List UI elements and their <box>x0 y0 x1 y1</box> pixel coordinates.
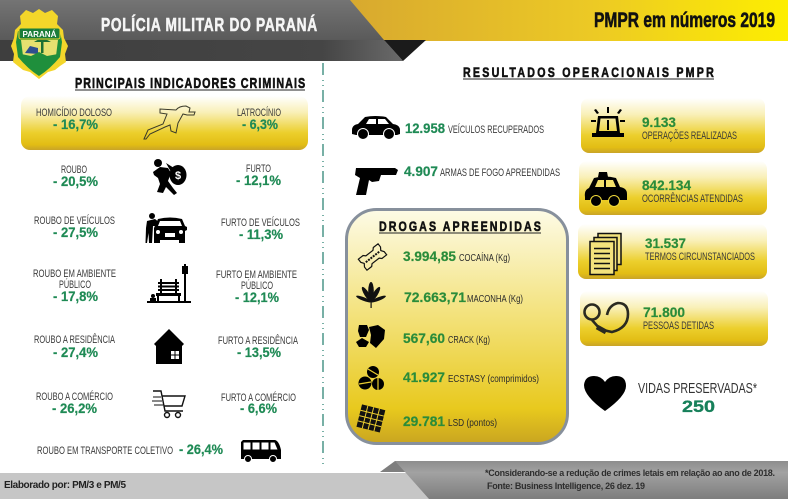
indicator: roubo de veículos: ROUBO DE VEÍCULOS <box>34 214 115 227</box>
stat: crack <box>403 331 490 346</box>
indicator: furto <box>236 163 281 188</box>
indicator: roubo a residência <box>34 333 115 360</box>
indicator: furto em ambiente público: PÚBLICO <box>241 279 273 292</box>
indicator: roubo: ROUBO <box>61 164 87 176</box>
stat: ecstasy: 41.927 <box>403 370 445 385</box>
header banner <box>0 0 788 61</box>
icon: recovered car <box>352 116 400 140</box>
indicator: roubo em transporte coletivo: - 26,4% <box>179 442 223 457</box>
indicator: roubo <box>53 164 98 189</box>
indicator: homicídio doloso: - 16,7% <box>53 117 98 132</box>
panel: operações realizadas <box>581 98 765 153</box>
stat: LSD: LSD (pontos) <box>448 417 497 429</box>
indicator: furto em ambiente público: FURTO EM AMBIENTE <box>216 269 297 281</box>
indicator: latrocínio: LATROCÍNIO <box>237 106 281 119</box>
stat: firearms seized: 4.907 <box>404 164 438 179</box>
indicator: roubo em ambiente público: ROUBO EM AMBIENTE <box>33 268 116 280</box>
stat: firearms seized <box>404 164 560 179</box>
indicator: homicídio doloso <box>36 106 112 132</box>
stat text: OCORRÊNCIAS ATENDIDAS <box>642 192 743 205</box>
heading: resultados operacionais: RESULTADOS OPERACIONAIS PMPR <box>463 65 714 80</box>
stat: cocaína <box>403 249 510 264</box>
icon: documents <box>590 234 621 274</box>
panel: ocorrências atendidas <box>579 161 767 215</box>
indicator: roubo a residência: ROUBO A RESIDÊNCIA <box>34 333 115 346</box>
indicator: furto a residência <box>218 334 298 360</box>
stat text: 842.134 <box>642 178 691 193</box>
indicator: roubo: - 20,5% <box>53 174 98 189</box>
stat: maconha <box>404 290 523 305</box>
footer notes: *Considerando-se a redução de crimes letais em relação ao ano de 2018. <box>485 468 775 478</box>
indicator: roubo em ambiente público: PÚBLICO <box>59 278 91 291</box>
panel: homicídio and latrocínio <box>21 96 308 150</box>
footer notes <box>485 468 775 491</box>
icon: cannabis leaf <box>355 282 387 308</box>
stat: vidas preservadas: 250 <box>682 397 715 416</box>
icon: shopping cart <box>152 391 185 418</box>
indicator: furto a residência: - 13,5% <box>237 345 281 360</box>
heading: principais indicadores criminais: PRINCIPAIS INDICADORES CRIMINAIS <box>75 74 305 91</box>
icon: chalk outline runner <box>144 106 195 139</box>
icon: siren <box>591 107 625 137</box>
stat: cocaína: COCAÍNA (Kg) <box>459 251 510 264</box>
footer band <box>0 461 788 499</box>
stat: cocaína: 3.994,85 <box>403 249 456 264</box>
icon: ecstasy pills <box>358 366 384 390</box>
stat text: 9.133 <box>642 115 676 130</box>
indicator: roubo a comércio <box>36 390 113 416</box>
crest: Paraná military police <box>11 9 68 79</box>
indicator: roubo em transporte coletivo: ROUBO EM TRANSPORTE COLETIVO <box>37 445 173 457</box>
stat: LSD <box>403 414 497 429</box>
header title left: POLÍCIA MILITAR DO PARANÁ <box>101 14 317 36</box>
stat text <box>642 115 737 142</box>
indicator: furto em ambiente público <box>216 269 297 305</box>
icon: pistol <box>355 168 398 195</box>
icon: crack rocks <box>356 325 385 348</box>
panel: drogas apreendidas <box>346 210 568 444</box>
stat text: 31.537 <box>645 236 686 251</box>
icon: house <box>154 329 184 364</box>
stat: vehicles recovered: 12.958 <box>405 121 445 136</box>
stat: firearms seized: ARMAS DE FOGO APREENDIDAS <box>440 167 560 179</box>
stat text: OPERAÇÕES REALIZADAS <box>642 129 737 142</box>
stat: crack: 567,60 <box>403 331 445 346</box>
stat text <box>642 178 743 205</box>
icon: robber with bag <box>153 159 186 195</box>
icon: handcuffs <box>584 303 628 332</box>
indicator: furto a comércio: FURTO A COMÉRCIO <box>221 391 296 404</box>
stat text <box>643 305 714 332</box>
indicator: furto: - 12,1% <box>236 173 281 188</box>
icon: police car <box>585 172 627 206</box>
indicator: roubo em ambiente público <box>33 268 116 304</box>
stat: vehicles recovered: VEÍCULOS RECUPERADOS <box>448 123 544 136</box>
stat: maconha: MACONHA (Kg) <box>467 293 523 305</box>
stat: vehicles recovered <box>405 121 544 136</box>
footer credit: Elaborado por: PM/3 e PM/5 <box>4 480 126 491</box>
indicator: furto: FURTO <box>246 163 271 175</box>
stat: crack: CRACK (Kg) <box>448 334 490 346</box>
indicator: latrocínio: - 6,3% <box>242 117 278 132</box>
icon: person breaking into car <box>146 213 187 243</box>
panel: termos circunstanciados <box>578 224 767 279</box>
indicator: roubo a comércio: - 26,2% <box>52 401 97 416</box>
icon: robber with bag: $ <box>175 170 181 182</box>
footer notes: Fonte: Business Intelligence, 26 dez. 19 <box>487 481 645 491</box>
stat: maconha: 72.663,71 <box>404 290 467 305</box>
icon: park bench and street lamp <box>147 264 191 303</box>
stat: vidas preservadas <box>638 381 757 416</box>
indicator: furto a residência: FURTO A RESIDÊNCIA <box>218 334 298 347</box>
panel heading: DROGAS APREENDIDAS <box>379 219 541 234</box>
indicator: furto a comércio <box>221 391 296 416</box>
stat text <box>645 236 755 263</box>
icon: LSD tabs <box>356 404 385 433</box>
icon: razor blade <box>358 244 387 270</box>
indicator: furto de veículos: FURTO DE VEÍCULOS <box>221 216 300 229</box>
indicator: roubo de veículos: - 27,5% <box>53 225 98 240</box>
icon: heart <box>584 376 626 411</box>
stat: ecstasy <box>403 370 539 385</box>
indicator: furto de veículos <box>221 216 300 242</box>
panel: pessoas detidas <box>580 291 768 346</box>
icon: bus <box>241 440 281 462</box>
stat text: PESSOAS DETIDAS <box>643 320 714 332</box>
indicator: homicídio doloso: HOMICÍDIO DOLOSO <box>36 106 112 119</box>
indicator: roubo de veículos <box>34 214 115 240</box>
stat: ecstasy: ECSTASY (comprimidos) <box>448 373 539 385</box>
stat: LSD: 29.781 <box>403 414 445 429</box>
indicator: roubo em ambiente público: - 17,8% <box>53 289 98 304</box>
indicator: furto em ambiente público: - 12,1% <box>235 290 279 305</box>
stat text: 71.800 <box>643 305 685 320</box>
indicator: roubo a residência: - 27,4% <box>53 345 98 360</box>
crest: Paraná military police: PARANÁ <box>22 30 57 39</box>
indicator: furto de veículos: - 11,3% <box>239 227 283 242</box>
indicator: latrocínio <box>237 106 281 132</box>
indicator: furto a comércio: - 6,6% <box>240 401 277 416</box>
indicator: roubo a comércio: ROUBO A COMÉRCIO <box>36 390 113 403</box>
